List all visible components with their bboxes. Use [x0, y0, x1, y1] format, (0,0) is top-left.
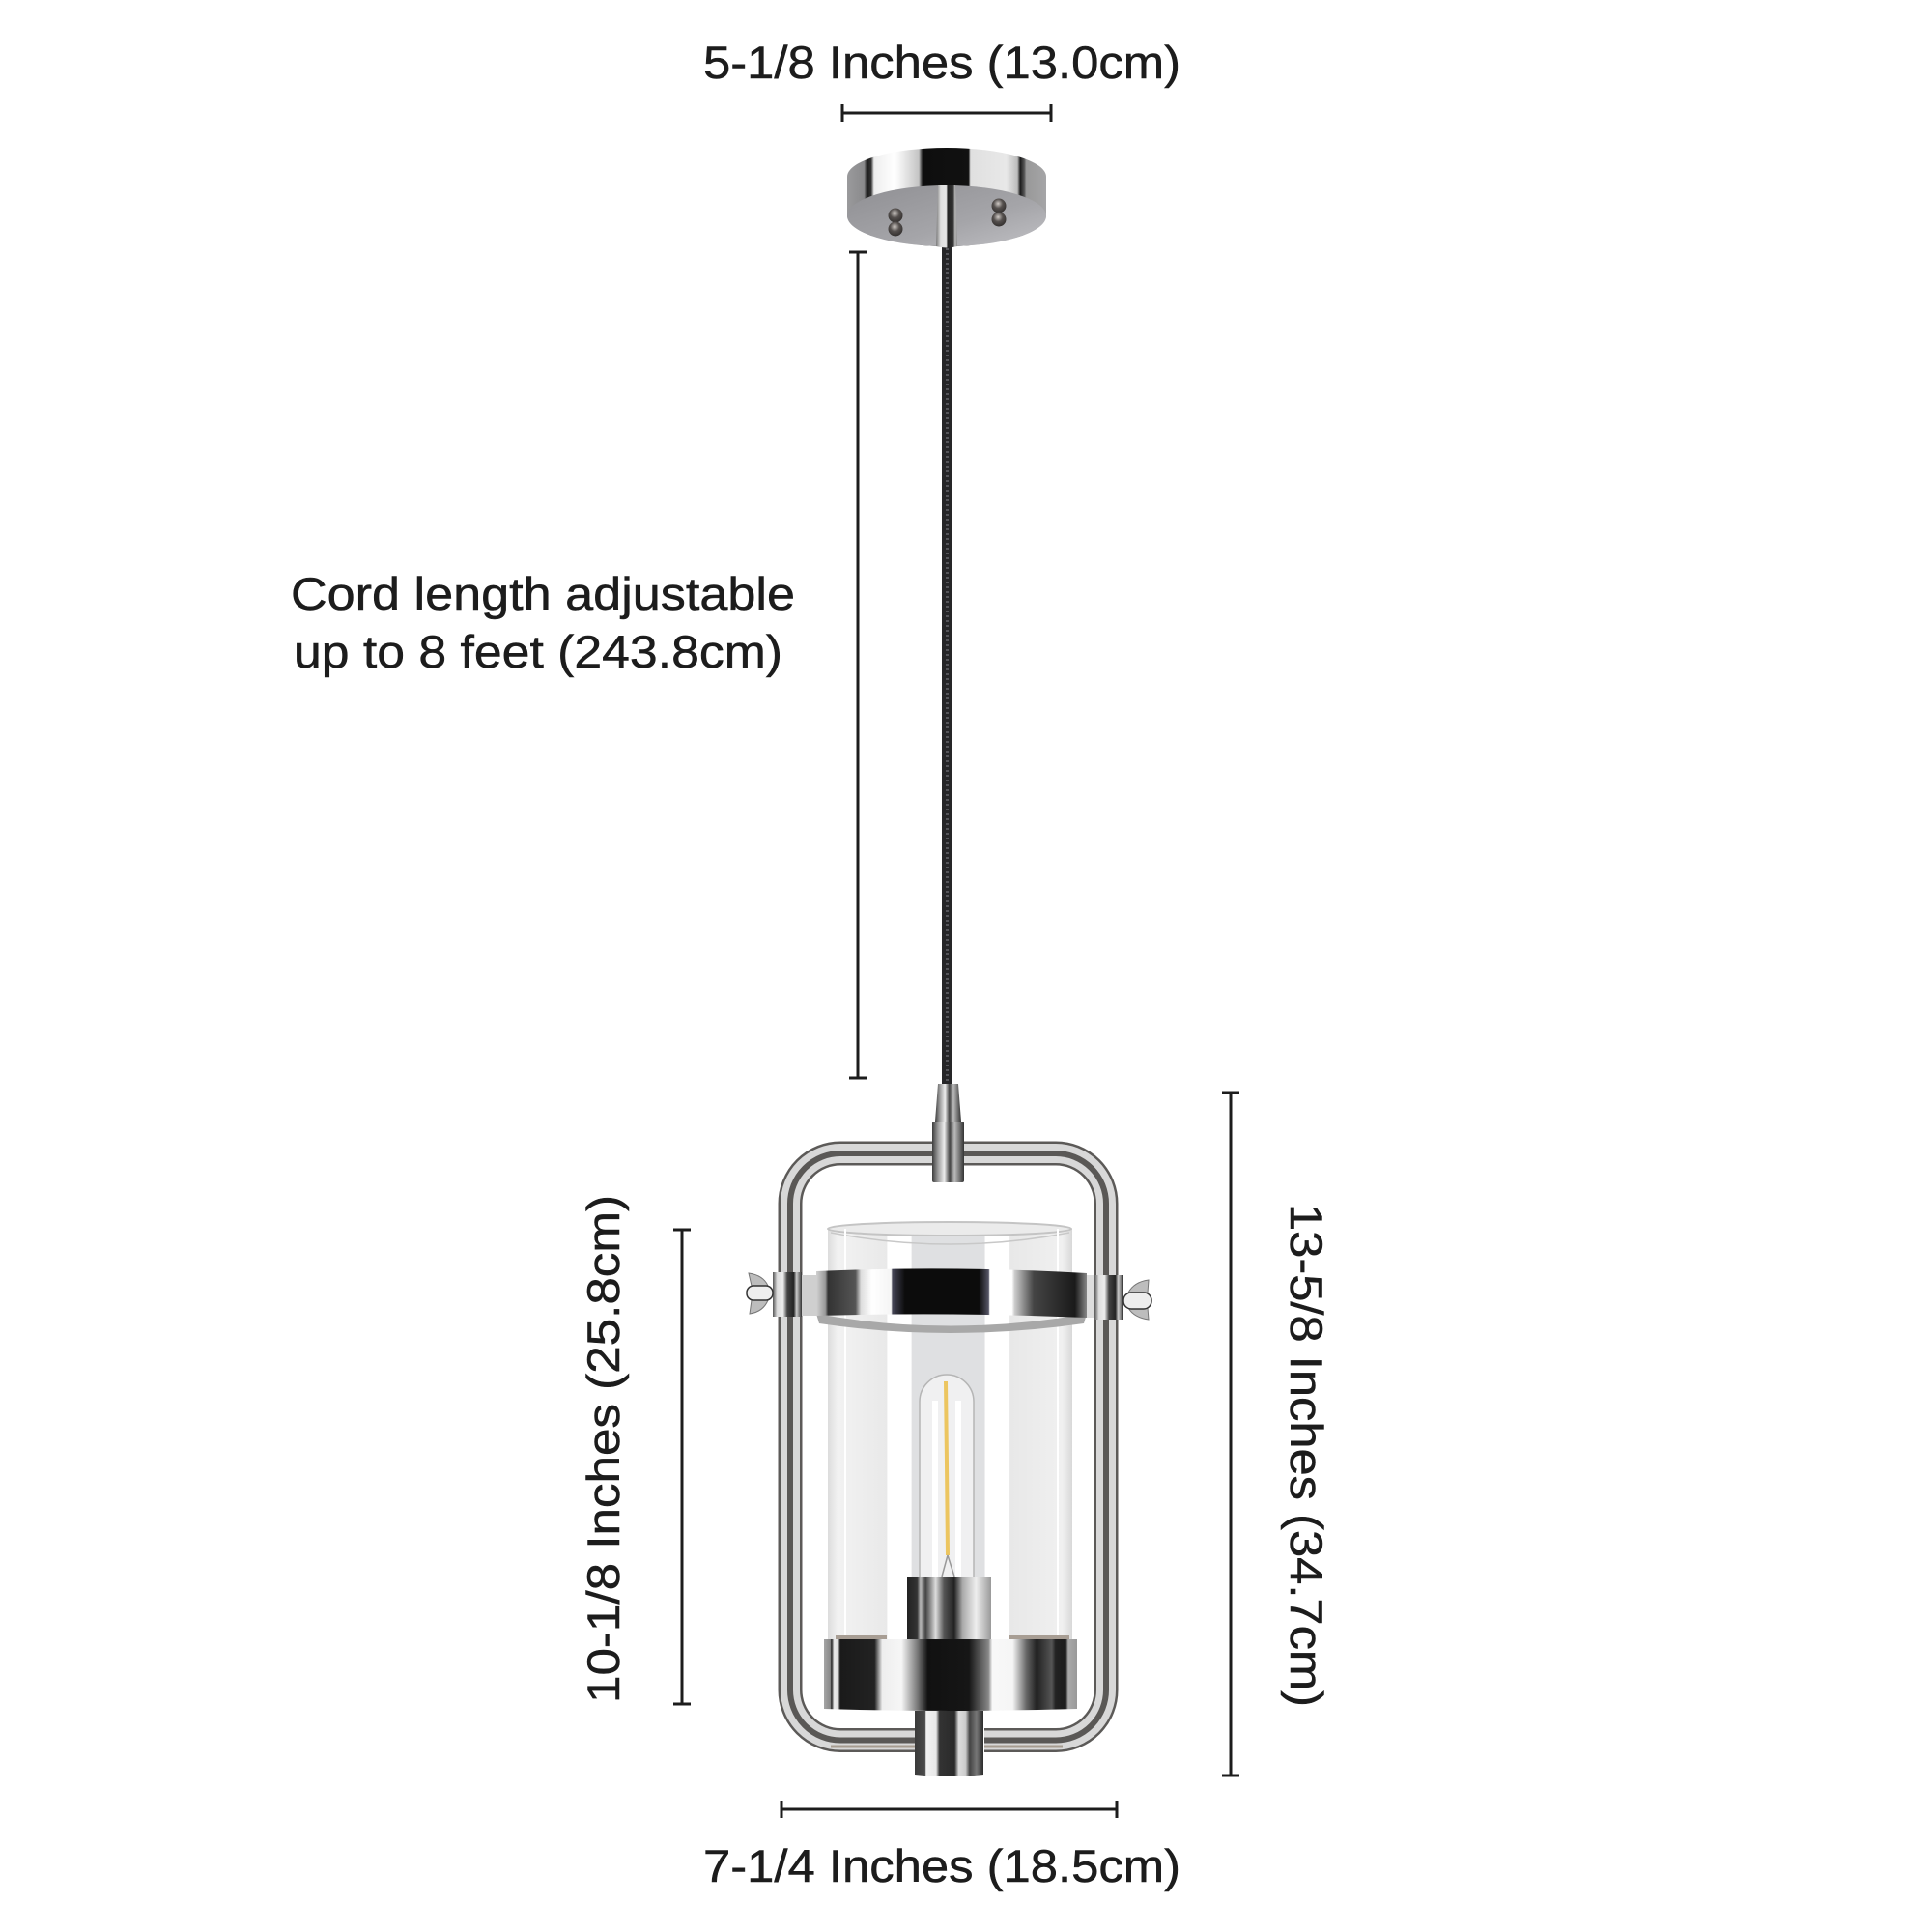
top width label: 5-1/8 Inches (13.0cm) [703, 37, 1180, 88]
cord [942, 243, 952, 1087]
base ring [824, 1639, 1077, 1711]
light bulb [920, 1375, 974, 1577]
canopy rim [847, 148, 1046, 246]
bulb socket [907, 1577, 991, 1643]
cord length label: Cord length adjustable [291, 568, 795, 619]
frame top connector [932, 1084, 964, 1182]
height of shade label: 10-1/8 Inches (25.8cm) [578, 1195, 629, 1703]
canopy face [847, 185, 1046, 246]
canopy screws [889, 199, 1007, 236]
top width dimension line [842, 104, 1051, 122]
height of shade dimension line [673, 1230, 691, 1704]
bottom width label: 7-1/4 Inches (18.5cm) [703, 1840, 1180, 1891]
cord length dimension line [849, 252, 867, 1078]
overall height label: 13-5/8 Inches (34.7cm) [1281, 1204, 1332, 1707]
left clamp and wing nut [747, 1272, 816, 1317]
glass cylinder [828, 1222, 1072, 1639]
filament [946, 1381, 948, 1555]
cord length label [291, 568, 795, 677]
ceiling canopy [847, 148, 1046, 247]
cord length label: up to 8 feet (243.8cm) [294, 626, 782, 677]
right clamp and wing nut [1087, 1275, 1151, 1320]
glass bottom rim reflections [836, 1635, 1069, 1639]
bottom width dimension line [781, 1801, 1117, 1818]
bottom cylinder [915, 1711, 983, 1776]
pendant frame [790, 1153, 1106, 1747]
upper metal band [816, 1268, 1087, 1333]
canopy stem [936, 185, 957, 247]
overall height dimension line [1222, 1093, 1239, 1776]
